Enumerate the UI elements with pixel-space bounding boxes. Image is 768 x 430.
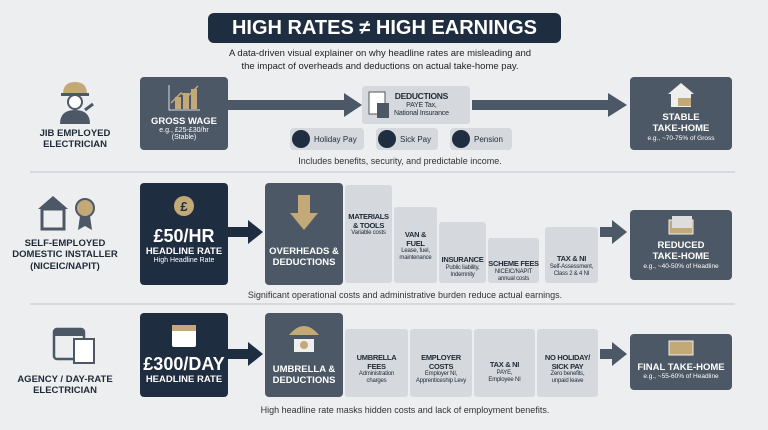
arrow — [600, 220, 627, 244]
label — [17, 374, 113, 396]
£300/day box: £300/DAY — [143, 354, 225, 374]
card: insurance — [439, 222, 486, 283]
card: employer costs: Employer NI, — [425, 371, 457, 377]
pill: pension: Pension — [474, 134, 503, 144]
deductions box: DEDUCTIONS — [395, 91, 448, 101]
reduced take-home box: e.g., ~40-50% of Headline — [643, 263, 719, 270]
card: umbrella fees: Administration — [359, 371, 394, 377]
title: HIGH RATES ≠ HIGH EARNINGS — [232, 17, 537, 39]
label: AGENCY / DAY-RATE — [17, 374, 113, 385]
overheads box: OVERHEADS & — [269, 246, 339, 257]
card: van: VAN & — [405, 230, 426, 239]
label: (NICEIC/NAPIT) — [30, 261, 100, 272]
card: tax & ni — [474, 329, 535, 397]
label: ELECTRICIAN — [33, 385, 97, 396]
card: no holiday: NO HOLIDAY/ — [545, 353, 590, 362]
card: insurance: Indemnity — [450, 272, 475, 278]
overheads box: DEDUCTIONS — [273, 257, 335, 268]
benefit pills — [290, 128, 512, 150]
label: SELF-EMPLOYED — [25, 238, 105, 249]
reduced take-home box — [630, 210, 732, 280]
card: umbrella fees — [345, 329, 408, 397]
pill: holiday pay: Holiday Pay — [314, 134, 357, 144]
arrow 1 — [228, 93, 362, 117]
card: scheme fees — [488, 238, 539, 283]
label: DOMESTIC INSTALLER — [12, 249, 118, 260]
card: no holiday: Zero benefits, — [551, 371, 584, 377]
icon: calendar — [52, 328, 95, 364]
card: tax & ni: TAX & NI — [557, 254, 586, 263]
card: insurance: Public liability, — [446, 265, 479, 271]
gross wage box: GROSS WAGE — [151, 116, 217, 127]
card: tax & ni: Class 2 & 4 NI — [554, 271, 589, 277]
stable take-home box — [630, 77, 732, 150]
card: materials: Variable costs — [351, 230, 386, 236]
stable take-home box: TAKE-HOME — [653, 123, 709, 134]
card: materials: & TOOLS — [353, 221, 384, 230]
£50/hr box: £ — [180, 199, 188, 214]
subtitle: the impact of overheads and deductions on actual take-home pay. — [241, 61, 519, 72]
caption: Includes benefits, security, and predictable income. — [298, 156, 502, 166]
stable take-home box: STABLE — [662, 112, 700, 123]
caption: Significant operational costs and administrative burden reduce actual earnings. — [248, 290, 562, 300]
card: tax & ni: TAX & NI — [490, 360, 519, 369]
card: umbrella fees: charges — [367, 378, 386, 384]
umbrella & deductions box — [265, 313, 343, 397]
£300/day box — [140, 313, 228, 397]
subtitle — [229, 48, 531, 72]
deductions box — [362, 86, 470, 124]
final take-home box: e.g., ~55-60% of Headline — [643, 373, 719, 380]
£300/day box: HEADLINE RATE — [146, 374, 222, 385]
card: materials — [345, 185, 392, 283]
final take-home box: FINAL TAKE-HOME — [637, 362, 725, 373]
pill: sick pay: Sick Pay — [400, 134, 431, 144]
label — [12, 238, 118, 272]
row 2: self-employed — [12, 183, 732, 300]
card: employer costs: Apprenticeship Levy — [416, 378, 466, 384]
arrow — [228, 342, 263, 366]
gross wage box: e.g., £25-£30/hr — [159, 127, 209, 134]
card: scheme fees: NICEIC/NAPIT — [495, 269, 532, 275]
card: scheme fees: SCHEME FEES — [488, 259, 539, 268]
card: umbrella fees: UMBRELLA — [357, 353, 396, 362]
caption: High headline rate masks hidden costs and lack of employment benefits. — [261, 405, 549, 415]
final take-home box — [630, 334, 732, 390]
reduced take-home box: TAKE-HOME — [653, 251, 709, 262]
deductions box: PAYE Tax, — [406, 102, 437, 109]
icon: electrician — [60, 82, 94, 124]
overheads box — [265, 183, 343, 285]
title — [208, 13, 561, 43]
gross wage box: (Stable) — [172, 134, 196, 141]
card: van — [394, 207, 437, 283]
row 1: JIB employed — [40, 77, 732, 166]
label: ELECTRICIAN — [43, 139, 107, 150]
card: employer costs: EMPLOYER — [421, 353, 461, 362]
stable take-home box: e.g., ~70-75% of Gross — [647, 135, 715, 142]
card: insurance: INSURANCE — [442, 255, 483, 264]
card: employer costs: COSTS — [429, 362, 453, 371]
card: van: Lease, fuel, — [401, 248, 430, 254]
pill: holiday pay — [290, 128, 364, 150]
card: materials: MATERIALS — [348, 212, 389, 221]
row 3: agency — [17, 313, 732, 415]
subtitle: A data-driven visual explainer on why headline rates are misleading and — [229, 48, 531, 59]
card: van: FUEL — [406, 239, 425, 248]
card: tax & ni: Employee NI — [488, 377, 521, 383]
gross wage box — [140, 77, 228, 150]
deductions box: National Insurance — [394, 110, 449, 117]
card: van: maintenance — [399, 255, 432, 261]
card: employer costs — [410, 329, 472, 397]
card: scheme fees: annual costs — [498, 276, 529, 282]
pill: pension — [450, 128, 512, 150]
card: tax & ni: PAYE, — [497, 370, 512, 376]
arrow — [600, 342, 627, 366]
card: tax & ni: Self-Assessment, — [550, 264, 593, 270]
umbrella & deductions box: UMBRELLA & — [273, 364, 335, 375]
label — [40, 128, 110, 150]
pill: sick pay — [376, 128, 438, 150]
card: no holiday — [537, 329, 598, 397]
£50/hr box: £50/HR — [153, 226, 215, 246]
arrow — [228, 220, 263, 244]
icon: house and badge — [38, 196, 95, 230]
label: JIB EMPLOYED — [40, 128, 110, 139]
card: tax & ni — [545, 227, 598, 283]
card: no holiday: SICK PAY — [552, 362, 583, 371]
card: no holiday: unpaid leave — [552, 378, 583, 384]
umbrella & deductions box: DEDUCTIONS — [273, 375, 335, 386]
£50/hr box: HEADLINE RATE — [146, 246, 222, 257]
arrow 2 — [472, 93, 627, 117]
£50/hr box — [140, 183, 228, 285]
card: umbrella fees: FEES — [367, 362, 386, 371]
reduced take-home box: REDUCED — [658, 240, 704, 251]
£50/hr box: High Headline Rate — [154, 257, 214, 264]
